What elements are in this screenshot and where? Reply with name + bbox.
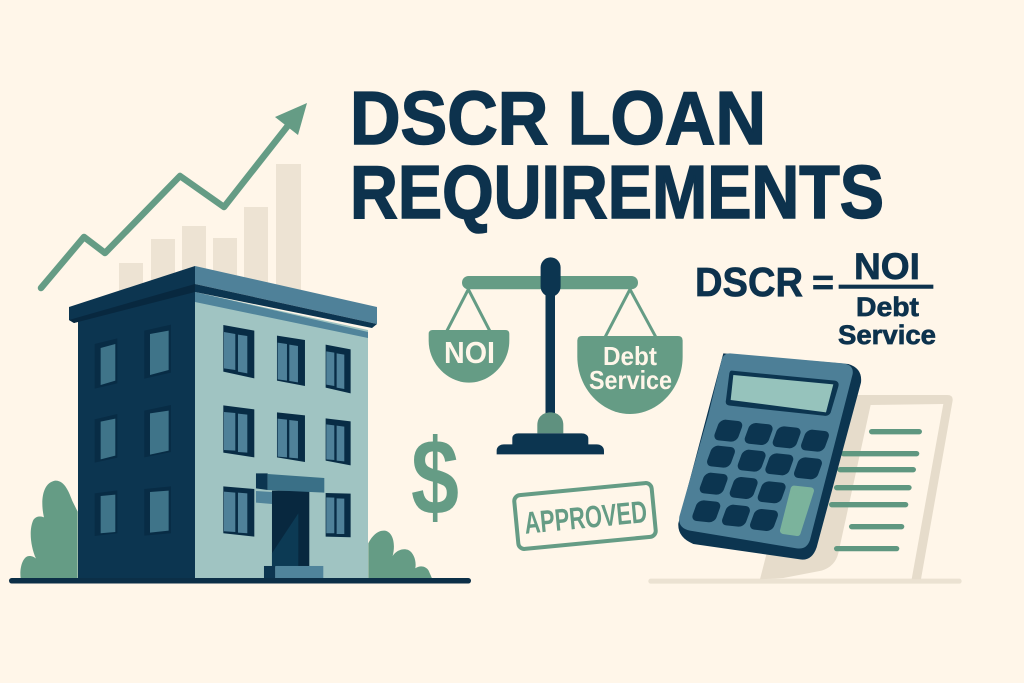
scale knob — [541, 257, 561, 297]
calculator equals key — [783, 489, 811, 533]
calculator face — [679, 353, 853, 549]
DSCR formula — [695, 246, 936, 350]
document text lines — [832, 432, 919, 549]
growth arrow — [41, 103, 307, 288]
windows — [95, 325, 351, 537]
DSCR formula: DSCR — [695, 259, 803, 305]
DSCR formula: Service — [838, 320, 936, 350]
title — [350, 76, 884, 234]
title: REQUIREMENTS — [350, 150, 884, 234]
bush left — [20, 481, 78, 578]
approved stamp — [514, 483, 656, 549]
building — [69, 266, 377, 579]
right pan: Debt Service — [577, 336, 683, 414]
scale post — [546, 290, 555, 415]
calculator — [678, 353, 861, 560]
ground line — [9, 578, 471, 584]
left wall — [78, 284, 195, 578]
left pan: NOI — [429, 330, 509, 383]
document sheet — [760, 395, 953, 579]
left pan: NOI: NOI — [444, 335, 495, 370]
background bar chart — [119, 164, 301, 303]
scale beam — [462, 276, 638, 289]
calculator display — [726, 371, 839, 416]
DSCR formula: = — [812, 264, 834, 302]
document behind calculator — [648, 395, 962, 584]
right wall — [195, 292, 368, 578]
scale base — [497, 412, 604, 454]
DSCR formula: Debt — [856, 292, 919, 322]
entrance door — [256, 473, 324, 579]
icon: dollar sign: $ — [411, 416, 459, 537]
bush right — [368, 531, 432, 578]
right pan: Debt Service: Debt — [603, 341, 657, 371]
calculator keys — [691, 419, 831, 532]
shelf line — [648, 579, 962, 584]
roof — [69, 266, 377, 338]
scale strings — [447, 289, 656, 337]
DSCR formula: NOI — [854, 246, 920, 287]
calculator case — [678, 353, 861, 560]
title: DSCR LOAN — [350, 76, 766, 160]
approved stamp: APPROVED — [523, 494, 649, 541]
balance scale — [429, 257, 683, 454]
right pan: Debt Service: Service — [589, 365, 672, 395]
